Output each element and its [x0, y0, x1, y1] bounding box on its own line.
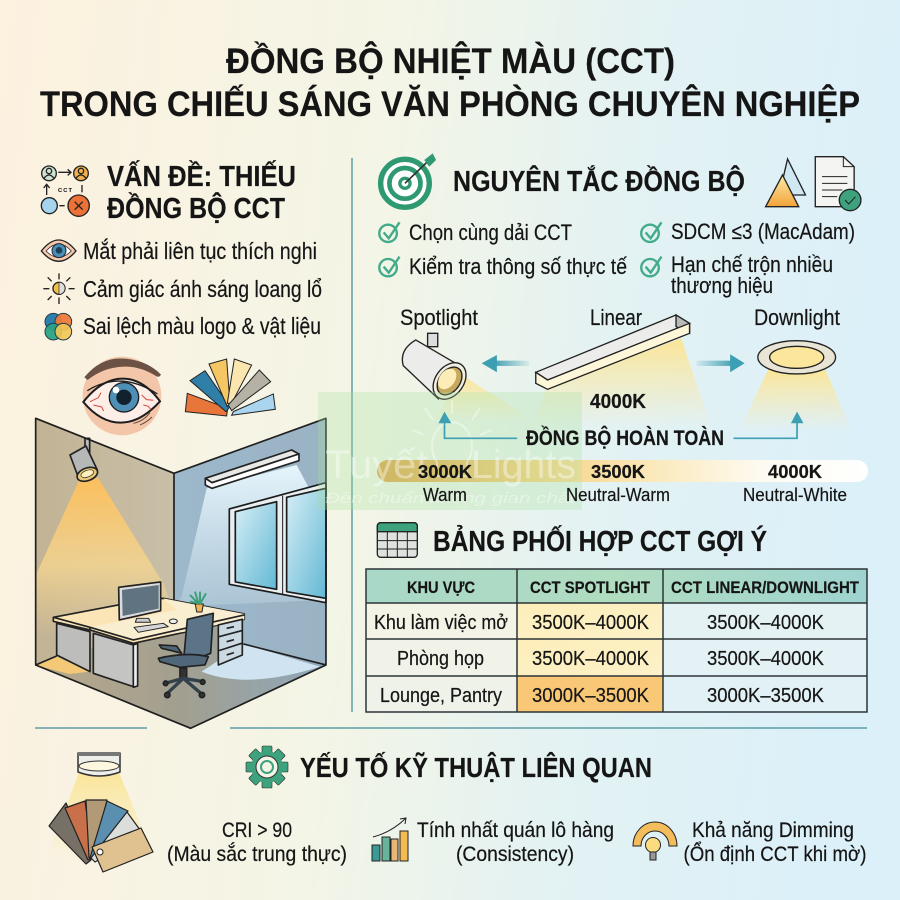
factor: consistency — [417, 819, 614, 866]
label: fully synchronized: ĐỒNG BỘ HOÀN TOÀN — [526, 426, 724, 450]
factor: dimming: (Ổn định CCT khi mờ) — [684, 842, 866, 866]
row: open workspace: 3500K–4000K — [532, 612, 650, 634]
factor: consistency: Tính nhất quán lô hàng — [417, 819, 614, 842]
row: open workspace: 3500K–4000K — [707, 612, 825, 634]
CCT scale labels: 3000K — [418, 462, 472, 482]
heading: problem: ĐỒNG BỘ CCT — [107, 191, 285, 225]
text: colour shift: Sai lệch màu logo & vật liệu — [83, 313, 321, 339]
factor: CRI: (Màu sắc trung thực) — [167, 843, 347, 866]
header row: KHU VỰC — [407, 578, 475, 597]
title: ĐỒNG BỘ NHIỆT MÀU (CCT) — [226, 41, 675, 81]
light beams — [434, 338, 852, 432]
heading: table: BẢNG PHỐI HỢP CCT GỢI Ý — [433, 524, 767, 558]
spotlight fixture — [70, 438, 100, 484]
desk panels — [57, 623, 90, 672]
watermark: Lights — [471, 443, 576, 487]
linear fixture — [205, 450, 299, 488]
label: 4000K: 4000K — [590, 391, 647, 413]
label: Downlight: Downlight — [754, 305, 840, 330]
icon: target — [381, 153, 436, 207]
heading: problem — [107, 159, 296, 225]
illustration: tired eye — [83, 357, 161, 435]
header row — [366, 569, 867, 603]
CCT scale labels: Neutral-Warm — [566, 485, 670, 505]
check: limit brands: Hạn chế trộn nhiều — [671, 252, 833, 277]
icon: document check — [815, 157, 861, 211]
CCT scale labels: Neutral-White — [743, 485, 847, 505]
arrow: to downlight — [696, 354, 745, 372]
icon: spotlight — [402, 333, 473, 405]
icon: sun — [43, 273, 75, 304]
CCT scale labels: 3500K — [591, 462, 645, 482]
title — [40, 41, 860, 124]
header row: CCT SPOTLIGHT — [530, 578, 651, 597]
table — [366, 569, 867, 712]
plant — [195, 604, 203, 612]
CCT gradient bar — [377, 460, 868, 482]
checklist — [379, 219, 855, 298]
illustration: office room — [36, 418, 326, 728]
title: TRONG CHIẾU SÁNG VĂN PHÒNG CHUYÊN NGHIỆP — [40, 84, 860, 124]
header row: CCT LINEAR/DOWNLIGHT — [671, 578, 860, 597]
factor: consistency: (Consistency) — [456, 843, 574, 866]
row: lounge — [366, 676, 867, 712]
window — [229, 483, 326, 603]
heading: technical factors: YẾU TỐ KỸ THUẬT LIÊN QUAN — [300, 751, 652, 783]
heading: principles: NGUYÊN TẮC ĐỒNG BỘ — [453, 164, 745, 198]
watermark: Đèn chuẩn không gian chất — [325, 490, 576, 507]
cool beam — [174, 465, 326, 607]
icon: CCT mismatch — [41, 166, 89, 216]
icon: table — [377, 523, 417, 557]
icon: eye — [41, 240, 76, 261]
right wall — [174, 418, 326, 665]
connector: right bracket — [733, 412, 803, 438]
text: eye adaptation: Mắt phải liên tục thích nghi — [83, 238, 317, 264]
row: lounge: Lounge, Pantry — [380, 685, 502, 707]
illustration: lamp and swatches — [46, 752, 155, 872]
label: Spotlight: Spotlight — [400, 305, 478, 330]
check: same CCT range: Chọn cùng dải CCT — [409, 220, 572, 245]
row: meeting room: 3500K–4000K — [532, 648, 650, 670]
row: meeting room: Phòng họp — [397, 648, 484, 670]
illustration: colour swatch fan — [185, 359, 275, 416]
row: meeting room — [366, 639, 867, 676]
arrow: to spotlight — [482, 355, 529, 372]
icon: linear light — [536, 315, 690, 389]
desk top — [53, 598, 244, 643]
panel: problem — [36, 159, 326, 728]
room outline — [36, 418, 326, 728]
check: limit brands: thương hiệu — [671, 273, 773, 298]
icon: CCT mismatch: CCT — [58, 188, 73, 194]
row: open workspace — [366, 603, 867, 639]
check: limit brands — [641, 252, 833, 298]
icon: colour circles — [45, 313, 72, 340]
keyboard and mouse — [134, 623, 168, 632]
watermark: Tuyết — [325, 443, 428, 487]
CCT scale labels — [418, 462, 847, 505]
icon: gear — [246, 746, 288, 788]
CCT scale labels: 4000K — [768, 462, 822, 482]
check: SDCM: SDCM ≤3 (MacAdam) — [671, 219, 855, 244]
left wall — [36, 418, 174, 665]
factor: CRI: CRI > 90 — [222, 819, 292, 842]
label: Linear: Linear — [590, 305, 642, 330]
factor: CRI — [167, 819, 347, 866]
warm beam — [37, 478, 173, 637]
icon: downlight — [758, 341, 836, 374]
icon: growth bars — [372, 818, 408, 861]
text: patchy light: Cảm giác ánh sáng loang lổ — [83, 276, 322, 302]
row: lounge: 3000K–3500K — [707, 685, 825, 707]
connector: left bracket — [438, 412, 517, 438]
floor — [36, 607, 326, 728]
factor: dimming — [684, 819, 866, 866]
row: lounge: 3000K–3500K — [532, 685, 650, 707]
panel: CCT table — [366, 523, 867, 712]
heading: problem: VẤN ĐỀ: THIẾU — [107, 159, 296, 193]
office chair — [158, 613, 213, 698]
panel: principles — [377, 153, 868, 482]
monitor — [119, 582, 161, 620]
row: meeting room: 3500K–4000K — [707, 648, 825, 670]
watermark — [318, 392, 582, 510]
factor: dimming: Khả năng Dimming — [692, 819, 854, 842]
drawers — [218, 619, 242, 665]
panel: technical factors — [46, 746, 866, 872]
icon: dimming bulb — [633, 822, 677, 860]
icon: light triangles — [766, 159, 805, 207]
row: open workspace: Khu làm việc mở — [374, 612, 508, 634]
CCT scale labels: Warm — [423, 485, 467, 505]
check: verify specs: Kiểm tra thông số thực tế — [409, 254, 627, 279]
